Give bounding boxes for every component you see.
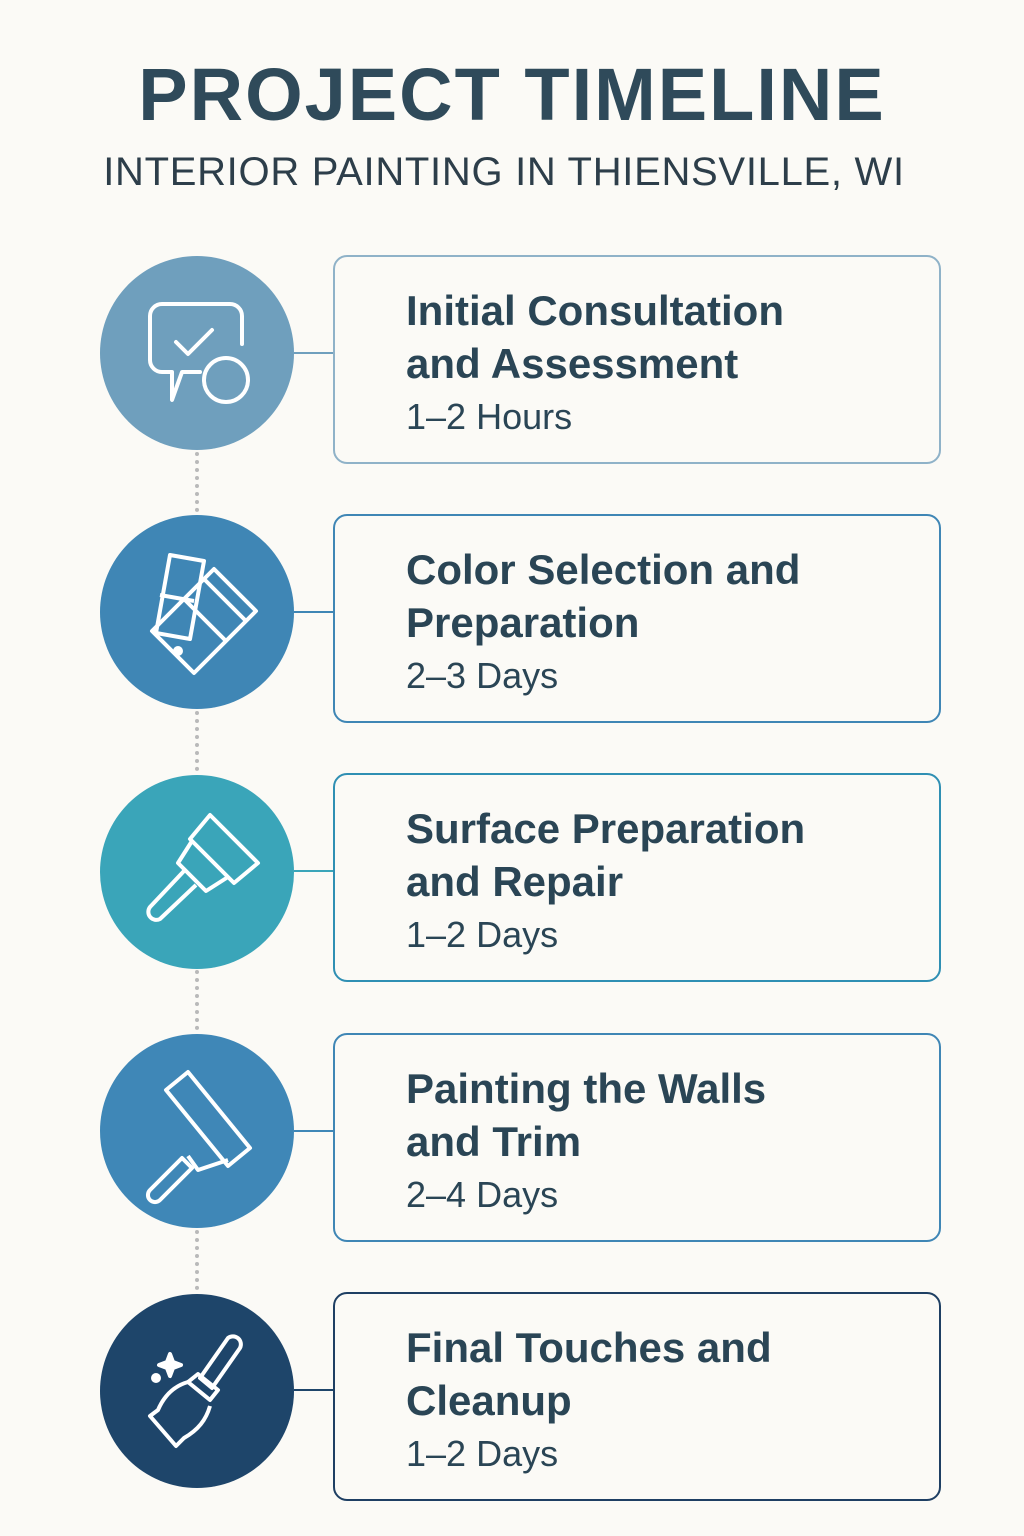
card 4: 2–4 Days [406, 1174, 558, 1215]
card 3: Surface Preparation [406, 805, 805, 852]
card 5: Final Touches and [406, 1324, 772, 1371]
card 5: Cleanup [406, 1377, 572, 1424]
card 1: 1–2 Hours [406, 396, 572, 437]
card 5: 1–2 Days [406, 1433, 558, 1474]
card 1: Initial Consultation [406, 287, 784, 334]
card 2: Preparation [406, 599, 639, 646]
icon: brush sparkle [100, 1294, 294, 1488]
step 2 [100, 514, 941, 723]
card 3: 1–2 Days [406, 914, 558, 955]
title: PROJECT TIMELINE [138, 53, 886, 136]
icon: scraper [100, 775, 294, 969]
step 5 [100, 1292, 941, 1501]
step 1 [100, 255, 941, 464]
card 2: Color Selection and [406, 546, 800, 593]
icon: swatches [100, 515, 294, 709]
card 2 [333, 514, 941, 723]
card 5 [333, 1292, 941, 1501]
card 1 [333, 255, 941, 464]
card 3: and Repair [406, 858, 623, 905]
step 3 [100, 773, 941, 982]
card 4: and Trim [406, 1118, 581, 1165]
step 4 [100, 1033, 941, 1242]
card 4: Painting the Walls [406, 1065, 766, 1112]
card 4 [333, 1033, 941, 1242]
subtitle: INTERIOR PAINTING IN THIENSVILLE, WI [103, 150, 905, 194]
card 3 [333, 773, 941, 982]
icon: roller [100, 1034, 294, 1228]
card 2: 2–3 Days [406, 655, 558, 696]
card 1: and Assessment [406, 340, 738, 387]
icon: consultation [100, 256, 294, 450]
